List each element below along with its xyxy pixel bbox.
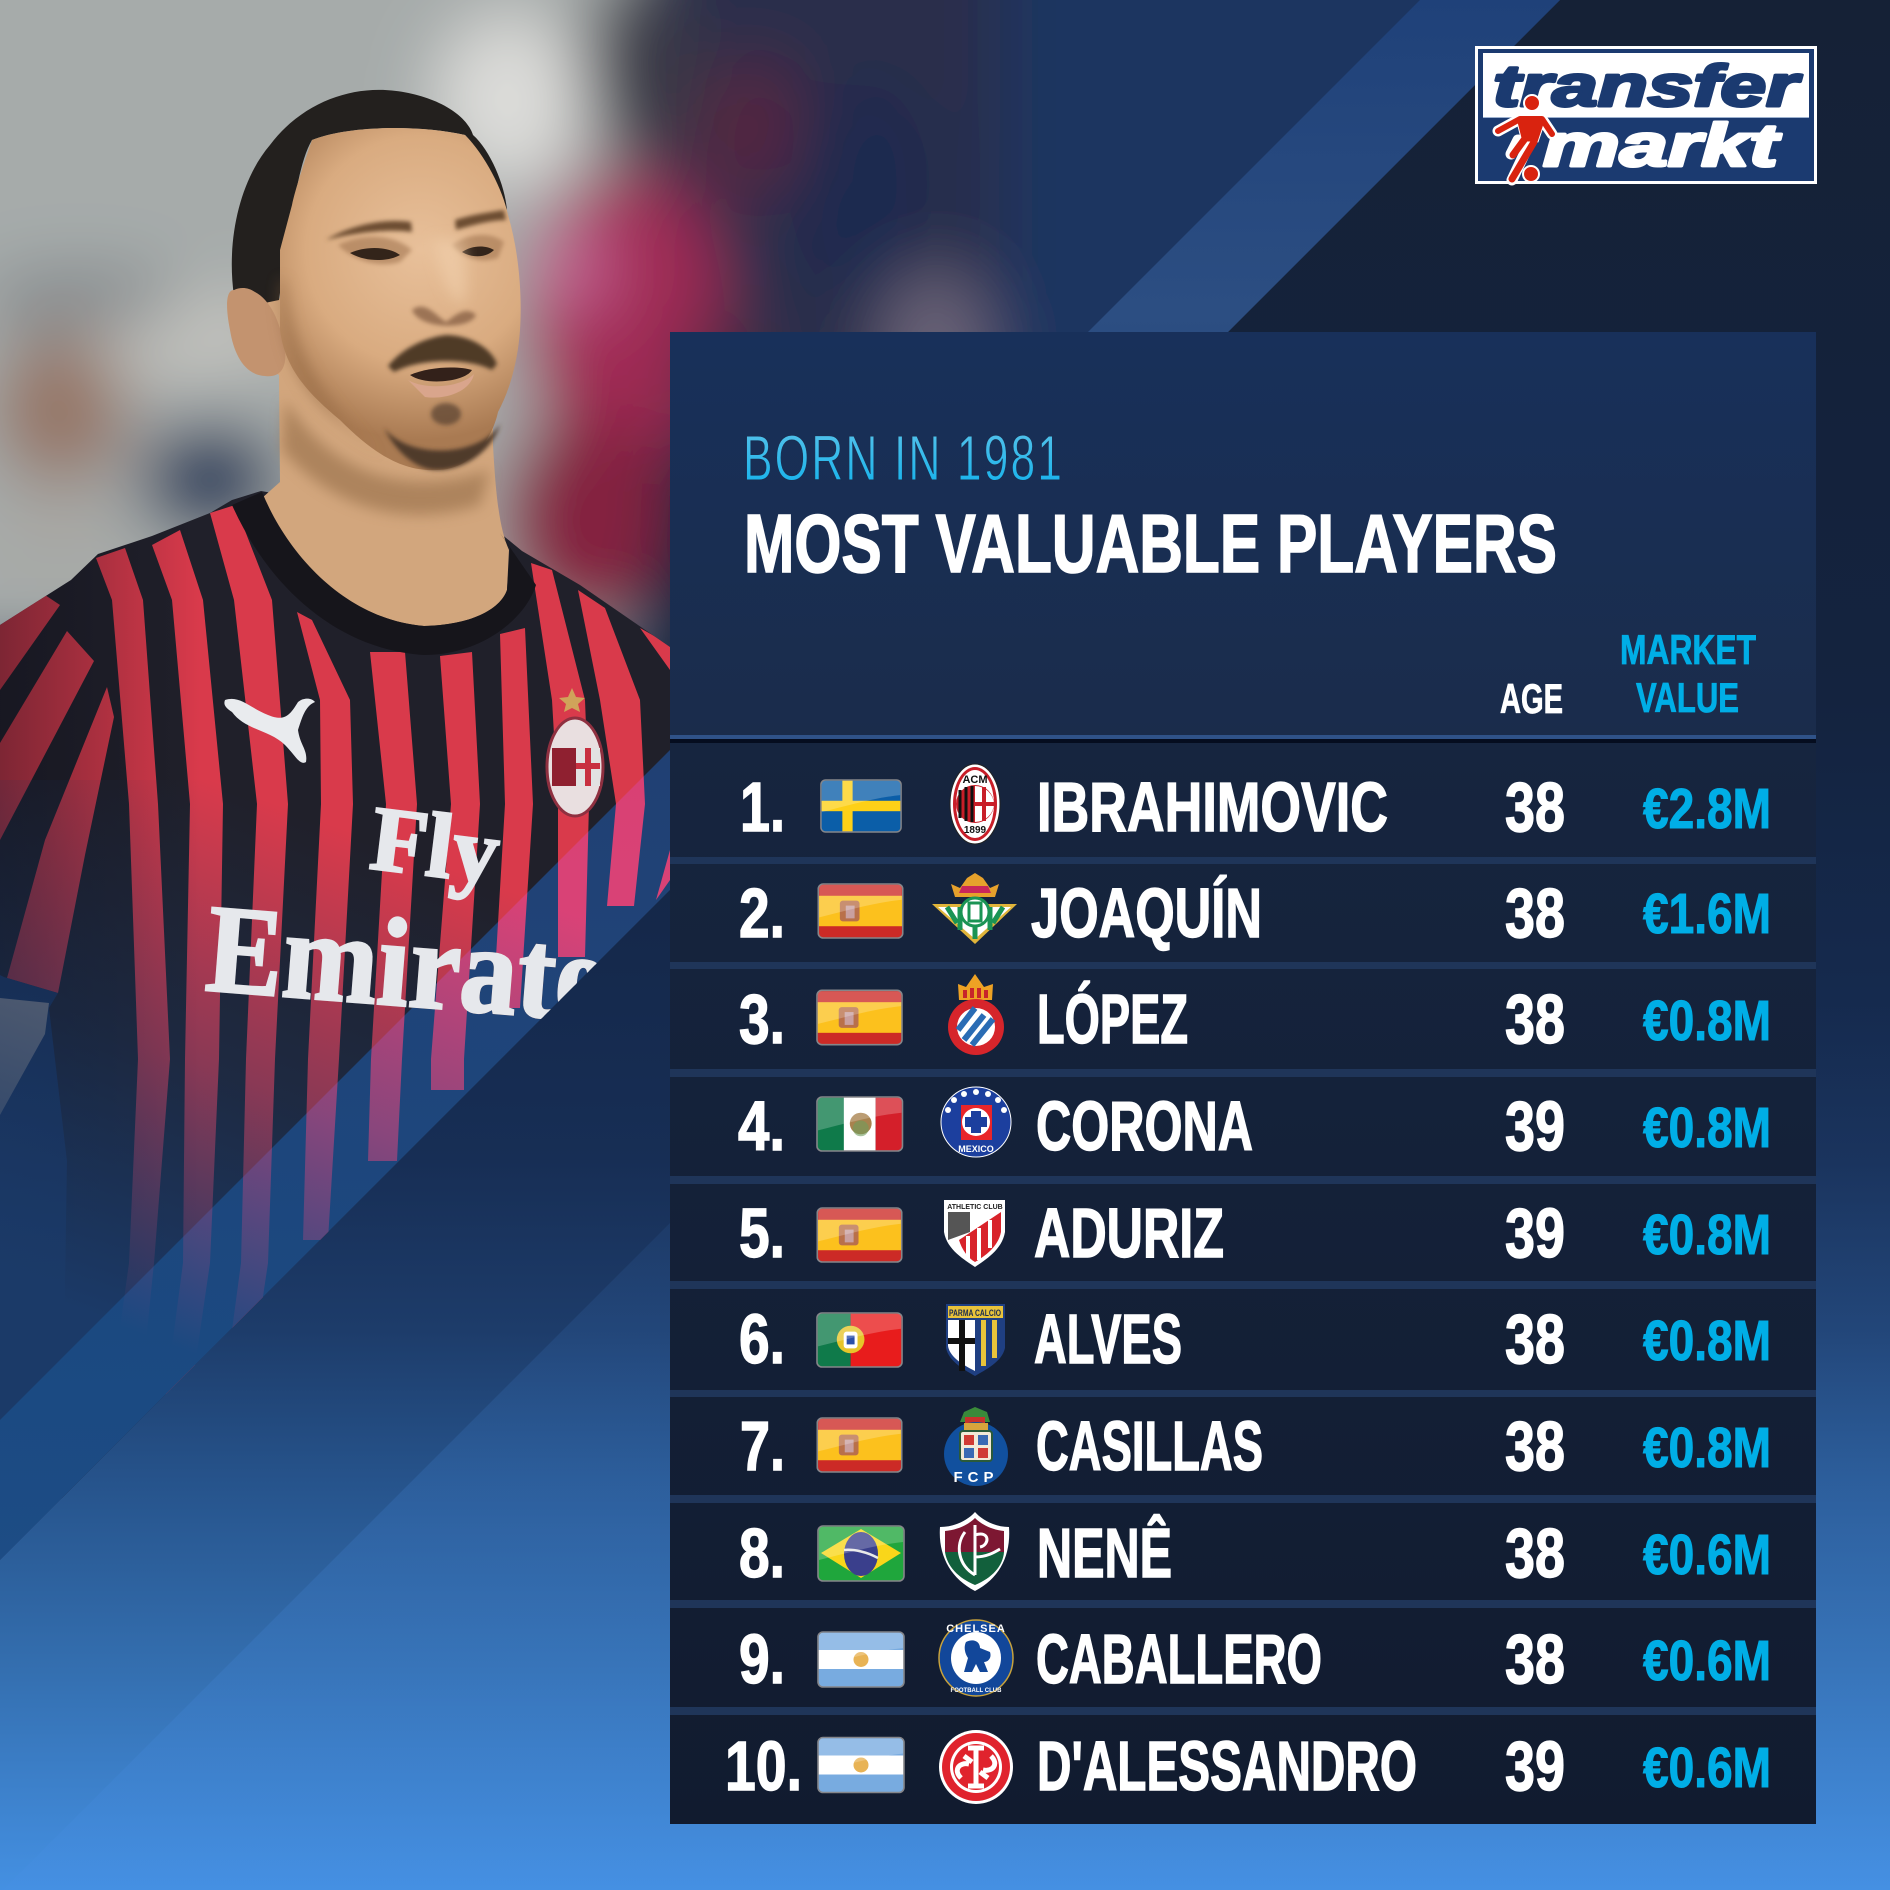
row 9: 9. [739,1620,785,1698]
flag: Mexico [816,1096,903,1152]
row 1: IBRAHIMOVIC [1037,768,1388,846]
row 8 [739,1512,1771,1592]
row 2: €1.6M [1643,882,1771,946]
forearm with tattoo [0,998,49,1115]
row 1 [740,764,1771,846]
row 10: €0.6M [1643,1736,1771,1800]
row 7: CASILLAS [1036,1407,1263,1485]
crest: Chelsea: FOOTBALL CLUB [951,1688,1002,1694]
title: MOST VALUABLE PLAYERS [744,497,1557,590]
flag: Spain [817,883,904,939]
logo: transfermarkt [1475,46,1817,184]
puma logo [224,699,315,763]
jersey fade overlay [0,780,585,1560]
row 9: 38 [1505,1620,1565,1698]
flag: Brazil [817,1525,905,1582]
cheek shading [274,280,346,426]
flag: Portugal [816,1312,903,1368]
row 4: 4. [738,1087,785,1165]
mustache [388,335,497,372]
row 2: 38 [1505,874,1565,952]
crest: Chelsea [939,1620,1013,1696]
flag: Argentina [817,1736,905,1794]
row 1: €2.8M [1643,777,1771,841]
eyebrows [326,210,506,240]
row 5: ADURIZ [1034,1194,1224,1272]
row 3: LÓPEZ [1037,980,1188,1058]
row 4 [738,1087,1771,1165]
sponsor text: Emirates [202,879,656,1053]
face [280,128,521,470]
column heading: market value [1620,626,1756,721]
row 8: €0.6M [1643,1523,1771,1587]
mouth [410,367,472,381]
row 10: 39 [1505,1727,1565,1805]
crest: Espanyol [948,974,1004,1055]
crest: AC Milan [950,764,1000,844]
panel: ranking table [670,332,1816,1824]
blurred stadium background [0,0,1560,646]
diagonal blue band [0,0,1560,1560]
crest: FC Porto: FCP [954,1469,998,1486]
row 6: €0.8M [1643,1309,1771,1373]
row 7: 7. [740,1407,785,1485]
row 2 [739,873,1771,952]
logo: transfermarkt: markt [1543,112,1782,179]
row 10: 10. [725,1727,802,1805]
goatee [384,403,500,470]
row 4: CORONA [1036,1087,1253,1165]
crest: Cruz Azul [941,1087,1011,1157]
row 6: 38 [1505,1300,1565,1378]
row 10: D'ALESSANDRO [1037,1727,1417,1805]
flag: Argentina [817,1631,905,1688]
crest: Cruz Azul: MEXICO [958,1144,994,1154]
flag: Sweden [820,779,902,833]
ear [227,288,285,376]
table body background [670,743,1816,1824]
row 4: €0.8M [1643,1096,1771,1160]
row 5: €0.8M [1643,1203,1771,1267]
hair [232,90,507,305]
nose [412,307,476,326]
row 4: 39 [1505,1087,1565,1165]
jersey [0,480,680,1580]
crest: Chelsea: CHELSEA [946,1623,1006,1635]
panel header background [670,332,1816,735]
logo footballer [1498,95,1552,182]
row 10 [725,1727,1771,1805]
row 8: 8. [739,1514,785,1592]
crest: Athletic Club: ATHLETIC CLUB [947,1204,1003,1211]
row 3: 38 [1505,980,1565,1058]
milan crest on jersey [547,688,603,816]
column heading: market value: VALUE [1636,674,1739,721]
row 3: €0.8M [1643,989,1771,1053]
crest: Parma [946,1304,1005,1376]
eye sockets [338,235,504,264]
crest: Athletic Club [944,1200,1005,1267]
row 6: 6. [739,1300,785,1378]
sponsor text: Fly [366,787,505,903]
row 5: 5. [739,1194,785,1272]
neck [252,298,509,626]
row 1: 38 [1505,768,1565,846]
crest: Fluminense [940,1512,1009,1591]
crest: AC Milan: 1899 [964,825,987,836]
logo wordmark: transfer [1493,54,1803,119]
row 8: NENÊ [1037,1513,1172,1592]
column heading: market value: MARKET [1620,626,1756,673]
row 6 [739,1300,1771,1378]
jersey collar [232,492,536,655]
player photo [0,0,1700,1580]
row 9: €0.6M [1643,1629,1771,1693]
crest: AC Milan: ACM [962,774,988,786]
crest: Parma: PARMA CALCIO [949,1308,1001,1318]
row 3: 3. [739,980,785,1058]
row 7: €0.8M [1643,1416,1771,1480]
eyes [350,246,494,260]
sponsor text [204,807,597,1019]
row 5: 39 [1505,1194,1565,1272]
crest: FC Porto [944,1407,1008,1486]
header rule [670,735,1816,739]
flag: Spain [816,1207,903,1263]
row 8: 38 [1505,1514,1565,1592]
column heading: age: AGE [1500,675,1563,722]
crest: Internacional [939,1730,1013,1804]
row 7: 38 [1505,1407,1565,1485]
row 6: ALVES [1034,1300,1182,1378]
row 2: 2. [739,874,785,952]
flag: Spain [816,989,903,1046]
row 7 [740,1407,1771,1486]
crest: Real Betis [932,873,1017,944]
flag: Spain [816,1417,903,1473]
row 1: 1. [740,768,785,846]
row 9 [739,1620,1771,1698]
row 5 [739,1194,1771,1272]
row 3 [739,974,1771,1058]
row 9: CABALLERO [1036,1620,1322,1698]
row 2: JOAQUÍN [1031,874,1262,952]
subtitle: BORN IN 1981 [743,422,1064,494]
